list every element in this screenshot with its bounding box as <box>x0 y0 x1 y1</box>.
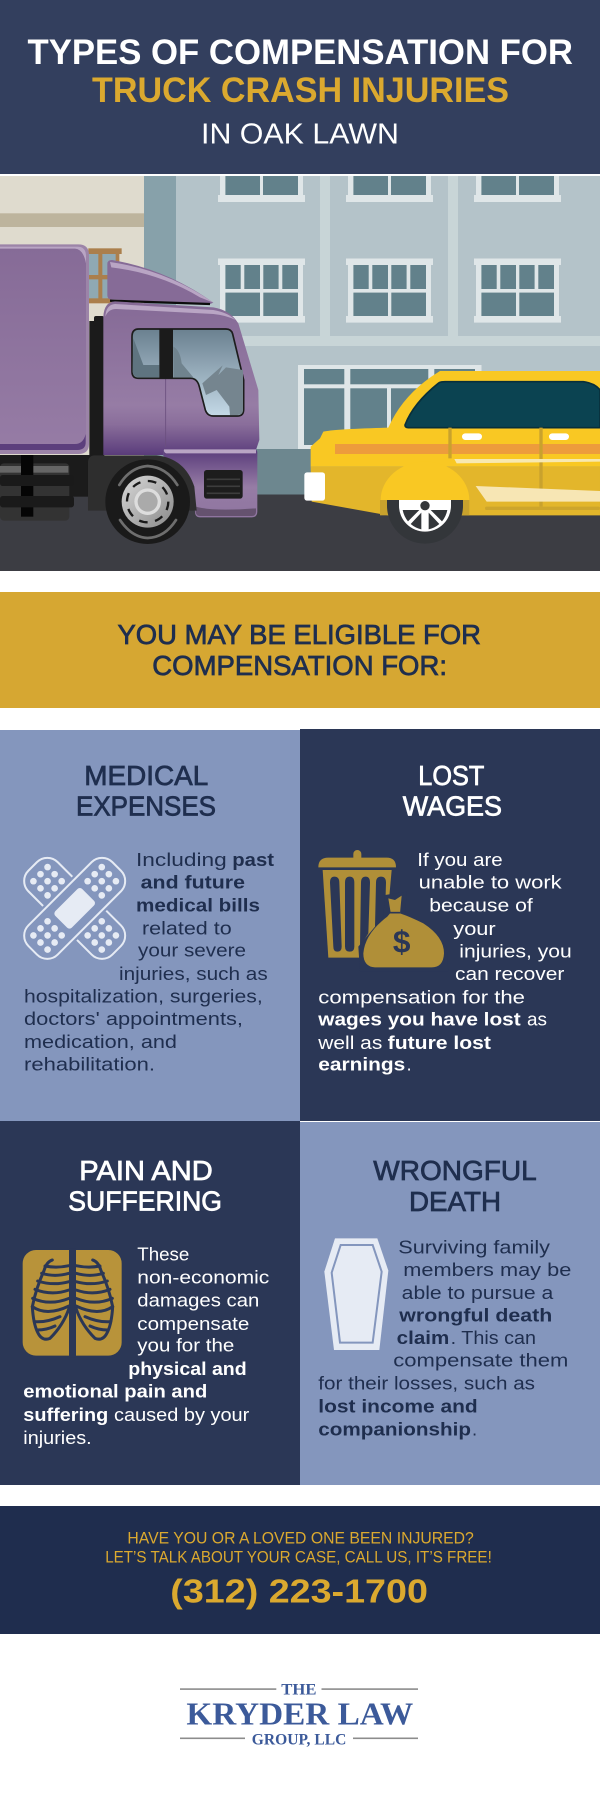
body text: pain and suffering: damages can <box>137 1290 259 1311</box>
body text: lost wages: injuries, you <box>459 940 572 961</box>
body text: medical expenses: hospitalization, surgeries, <box>24 986 263 1007</box>
panel: eligibility banner: YOU MAY BE ELIGIBLE FOR <box>118 619 481 650</box>
panel: eligibility banner: COMPENSATION FOR: <box>152 650 447 681</box>
body text: lost wages: wages you have lost <box>317 1009 521 1030</box>
body text: pain and suffering: emotional pain and <box>23 1381 207 1402</box>
panel: wrongful death <box>300 1122 600 1485</box>
heading: medical expenses <box>76 760 216 822</box>
body text: medical expenses: past <box>232 849 274 870</box>
body text: pain and suffering: physical and <box>128 1358 247 1379</box>
cargo box <box>0 244 89 454</box>
body text: pain and suffering: injuries. <box>23 1427 92 1448</box>
body text: lost wages: . <box>406 1054 412 1075</box>
title line 2: TRUCK CRASH INJURIES <box>92 70 509 110</box>
body text: wrongful death: . <box>472 1419 477 1440</box>
illustration: truck crash street scene <box>0 176 600 572</box>
heading: pain and suffering: PAIN AND <box>79 1155 213 1186</box>
call to action text: LET’S TALK ABOUT YOUR CASE, CALL US, IT’S FREE! <box>105 1548 492 1567</box>
body text: wrongful death: for their losses, such as <box>318 1372 535 1393</box>
body text: lost wages: can recover <box>455 963 564 984</box>
body text: wrongful death: claim <box>397 1327 449 1348</box>
body text: lost wages: as <box>527 1009 547 1030</box>
logo: The Kryder Law Group <box>180 1681 418 1748</box>
beige building <box>0 176 176 457</box>
panel: medical expenses <box>0 730 300 1121</box>
grey apartment building <box>176 176 600 496</box>
body text: medical expenses: doctors' appointments, <box>24 1008 243 1029</box>
heading: wrongful death: DEATH <box>409 1186 501 1217</box>
icon: yellow car <box>304 371 600 544</box>
body text: medical expenses: medication, and <box>24 1031 177 1052</box>
logo: The Kryder Law Group: THE <box>281 1681 316 1698</box>
heading: wrongful death <box>373 1155 537 1217</box>
body text: pain and suffering: you for the <box>137 1335 234 1356</box>
wheel arch <box>88 455 197 511</box>
body text: medical expenses: rehabilitation. <box>24 1054 155 1075</box>
body text: lost wages: your <box>453 918 496 939</box>
car headlight <box>304 472 325 501</box>
body text: wrongful death: wrongful death <box>398 1305 552 1326</box>
body text: pain and suffering: compensate <box>137 1313 249 1334</box>
truck cab <box>103 301 259 455</box>
body text: wrongful death: lost income and <box>318 1396 478 1417</box>
body text: lost wages: future lost <box>388 1032 491 1053</box>
body text: pain and suffering: suffering <box>23 1404 108 1425</box>
body text: medical expenses: medical bills <box>136 894 260 915</box>
body text: lost wages: If you are <box>417 849 503 870</box>
heading: lost wages: WAGES <box>403 791 502 822</box>
body text: lost wages: because of <box>429 895 534 916</box>
front bumper <box>163 449 257 517</box>
body text: wrongful death: members may be <box>403 1259 571 1280</box>
body text: pain and suffering: non-economic <box>137 1266 269 1287</box>
phone number: (312) 223-1700 <box>170 1573 428 1610</box>
body text: pain and suffering: caused by your <box>114 1404 249 1425</box>
body text: medical expenses <box>24 849 274 1075</box>
logo: The Kryder Law Group: GROUP, LLC <box>252 1731 346 1748</box>
icon: purple truck <box>0 244 259 544</box>
body text: lost wages: well as <box>317 1032 382 1053</box>
panel: pain and suffering <box>0 1121 300 1485</box>
cab window <box>132 329 244 416</box>
panel: eligibility banner <box>0 592 600 708</box>
truck rear window <box>88 248 122 303</box>
car lower body <box>311 467 600 515</box>
icon: coffin <box>324 1238 388 1350</box>
body text: medical expenses: and future <box>141 872 245 892</box>
fuel tank <box>0 455 74 521</box>
body text: wrongful death: . This can <box>451 1327 536 1348</box>
car upper body <box>311 371 600 467</box>
car window <box>405 382 600 428</box>
subtitle: IN OAK LAWN <box>201 119 399 151</box>
body text: wrongful death: Surviving family <box>398 1236 551 1257</box>
body text: pain and suffering: These <box>137 1244 189 1265</box>
panel: lost wages <box>300 729 600 1121</box>
body text: lost wages: earnings <box>318 1054 405 1075</box>
heading: medical expenses: MEDICAL <box>84 760 208 791</box>
heading: pain and suffering: SUFFERING <box>68 1186 222 1217</box>
heading: medical expenses: EXPENSES <box>76 791 216 822</box>
truck wheel <box>105 459 190 544</box>
body text: wrongful death: companionship <box>318 1419 471 1440</box>
heading: lost wages <box>403 760 502 822</box>
body text: wrongful death: compensate them <box>393 1350 568 1371</box>
body text: lost wages <box>317 849 572 1075</box>
panel: title header <box>0 0 600 174</box>
heading: wrongful death: WRONGFUL <box>373 1155 537 1186</box>
title line 1: TYPES OF COMPENSATION FOR <box>28 32 573 72</box>
body text: medical expenses: injuries, such as <box>119 963 268 984</box>
icon: crossed bandages <box>18 852 131 965</box>
icon: rib cage <box>23 1248 122 1357</box>
body text: lost wages: unable to work <box>419 871 563 892</box>
body text: pain and suffering <box>23 1244 269 1448</box>
road <box>0 494 600 572</box>
panel: call to action footer <box>0 1506 600 1634</box>
heading: lost wages: LOST <box>418 760 484 791</box>
heading: pain and suffering <box>68 1155 222 1217</box>
logo: The Kryder Law Group: KRYDER LAW <box>186 1695 413 1731</box>
body text: medical expenses: your severe <box>138 940 246 961</box>
call to action text: HAVE YOU OR A LOVED ONE BEEN INJURED? <box>127 1528 474 1547</box>
body text: wrongful death <box>318 1236 571 1440</box>
icon: trash can and money bag <box>318 850 448 972</box>
body text: medical expenses: Including <box>136 849 227 870</box>
air deflector <box>107 260 213 305</box>
body text: medical expenses: related to <box>142 917 232 938</box>
car wheel <box>380 462 469 544</box>
body text: wrongful death: able to pursue a <box>402 1282 554 1303</box>
call to action text <box>105 1528 492 1567</box>
car stripe and trim <box>335 428 600 510</box>
icon: trash can and money bag: $ <box>393 924 411 960</box>
body text: lost wages: compensation for the <box>318 986 525 1007</box>
